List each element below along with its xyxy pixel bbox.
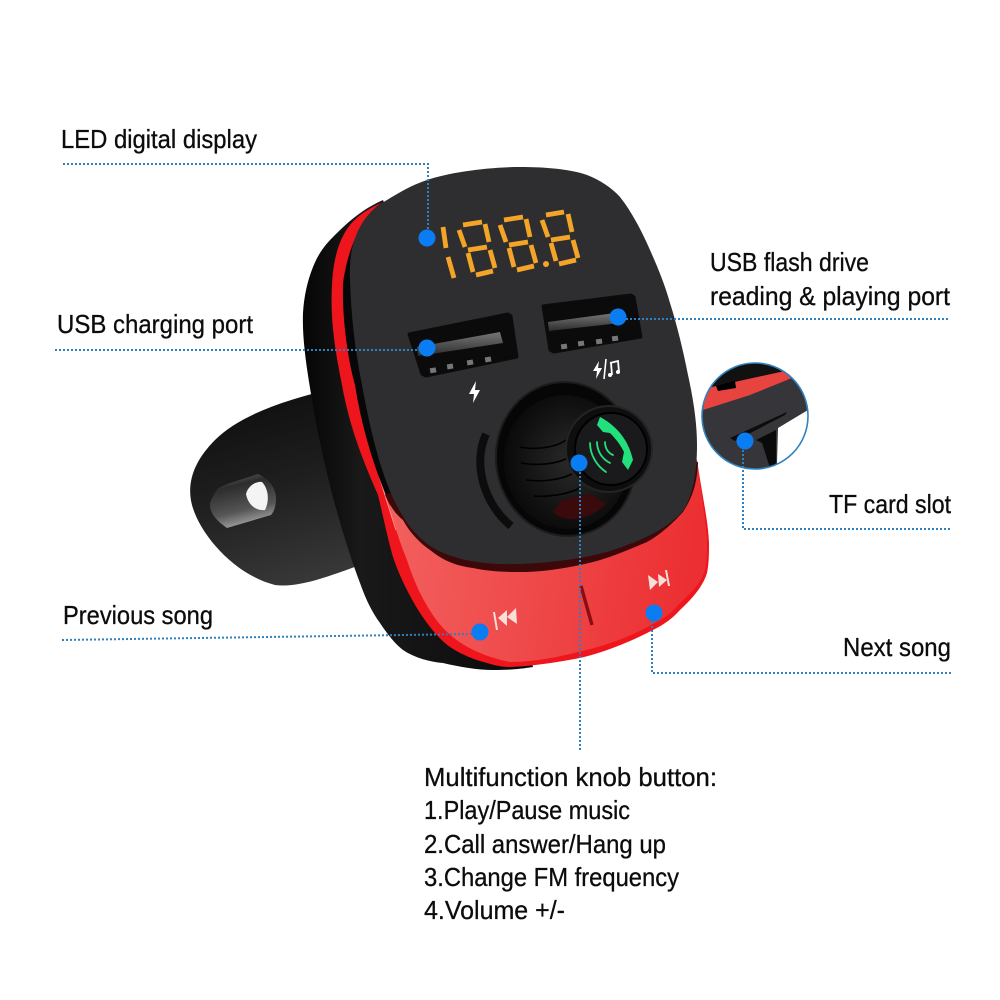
icon: next track [648,570,670,590]
bright red side band [332,202,709,667]
callout: LED digital display: LED digital display [61,124,257,154]
callout: Multifunction knob: 2.Call answer/Hang up [424,829,666,859]
callout: LED digital display [61,124,436,246]
car plug barrel [190,388,368,585]
red plate shadow rim [385,462,698,572]
callout: Multifunction knob: 1.Play/Pause music [424,795,630,825]
USB music port [543,295,641,352]
black rim around face [343,202,450,505]
main black body [303,200,533,670]
knob shadow arc [480,434,511,526]
inset: TF card slot detail [700,362,810,472]
LED display digits 188.8 [443,212,578,278]
product: car FM transmitter [190,167,709,670]
icon: green phone handset [590,417,633,472]
callout: Multifunction knob: 3.Change FM frequency [424,862,679,892]
callout: TF card slot [736,432,952,529]
callout: Previous song [62,600,488,640]
callout: Next song: Next song [843,632,951,662]
callout: USB charging port [55,309,436,356]
callout: Previous song: Previous song [63,600,213,630]
multifunction knob [486,373,652,545]
callout: USB flash drive port: reading & playing port [710,281,951,311]
callout: Multifunction knob: 4.Volume +/- [424,895,565,925]
callout: Next song [646,604,952,673]
red lower plate [386,440,707,662]
callout: USB flash drive port: USB flash drive [710,247,869,277]
callout: USB charging port: USB charging port [57,309,254,339]
USB charging port [409,314,517,376]
callout: TF card slot: TF card slot [829,489,952,519]
center slit on red plate [581,586,592,625]
black face plate [350,167,697,564]
icon: bolt and music note [593,359,620,379]
icon: lightning bolt [469,381,480,403]
metal plug tip [210,474,276,528]
red strip highlight [346,290,396,530]
callout: USB flash drive port [610,247,951,326]
icon: previous track [493,608,517,630]
callout: Multifunction knob: Multifunction knob button: [424,762,717,792]
callout: Multifunction knob [424,454,717,925]
